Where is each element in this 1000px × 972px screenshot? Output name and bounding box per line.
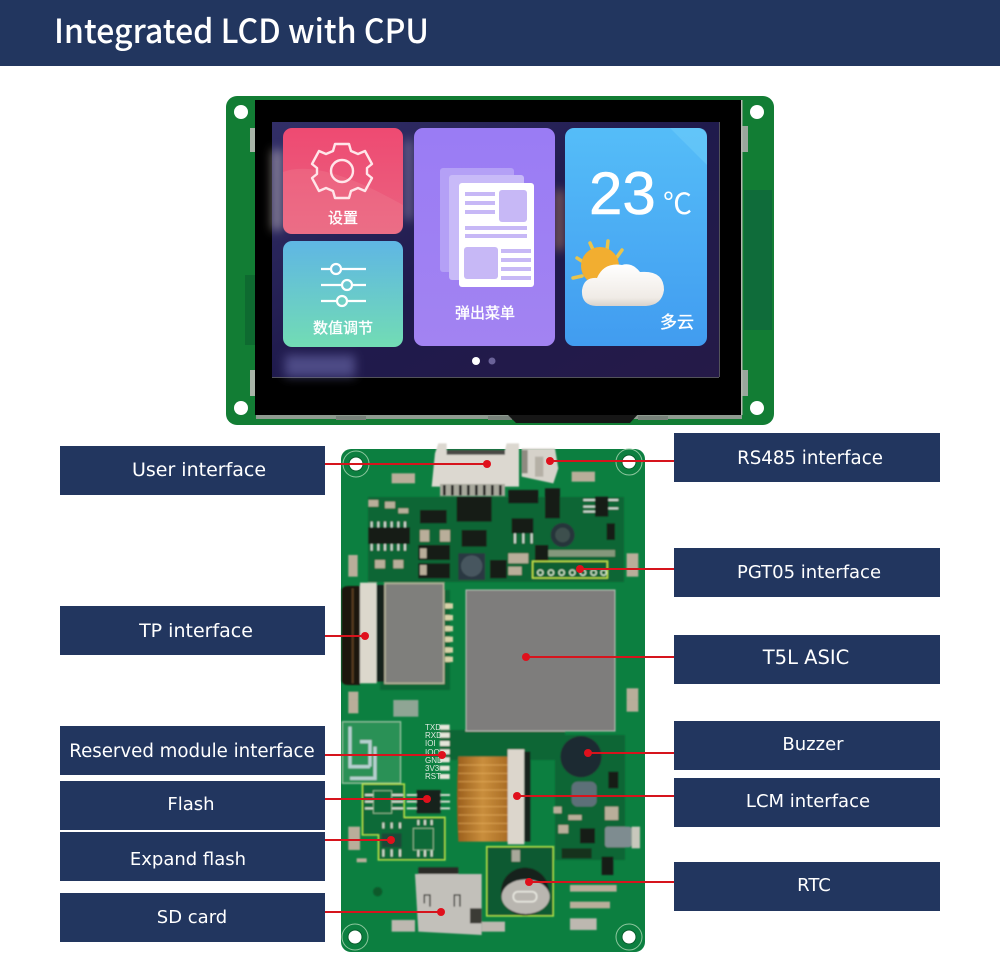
label: cloudy: 多云 xyxy=(660,313,694,332)
label: T5L ASIC xyxy=(674,635,940,684)
label: LCM interface: LCM interface xyxy=(746,791,870,812)
mounting holes xyxy=(348,455,636,944)
RS485 connector xyxy=(522,448,558,483)
bottom half components xyxy=(342,700,640,935)
icon: gear xyxy=(312,144,372,198)
darker board zones xyxy=(368,497,625,860)
serial pad labels: TXD xyxy=(425,723,441,732)
label: Flash xyxy=(60,781,325,830)
PCB back view xyxy=(341,443,645,952)
icon: sun and cloud xyxy=(573,241,664,306)
icon: sliders xyxy=(321,264,366,306)
label: SD card xyxy=(60,893,325,942)
label: Expand flash: Expand flash xyxy=(130,849,246,870)
serial pad labels: 3V3 xyxy=(425,764,440,773)
test pads xyxy=(445,603,453,662)
chips xyxy=(368,488,615,578)
icon: document xyxy=(440,168,534,287)
label: Flash: Flash xyxy=(167,794,215,815)
callout dots xyxy=(361,457,592,916)
label: RS485 interface xyxy=(674,433,940,482)
flash outline xyxy=(362,784,445,860)
small shield xyxy=(385,583,444,683)
label: T5L ASIC: T5L ASIC xyxy=(762,646,849,669)
inductors and parts xyxy=(572,782,597,807)
serial pad labels: IOI xyxy=(425,739,436,748)
label: RTC: RTC xyxy=(797,875,831,896)
label: RS485 interface: RS485 interface xyxy=(737,448,883,469)
TP FPC connector xyxy=(342,586,360,685)
card: value adjustment xyxy=(283,241,403,347)
small passives xyxy=(348,472,638,577)
card: popup menu xyxy=(414,128,555,346)
gold FPC ribbon xyxy=(457,757,508,842)
screen xyxy=(272,122,720,378)
PCB components (soft photo look) xyxy=(342,443,640,935)
top half components xyxy=(342,443,638,700)
label: value adjustment: 数值调节 xyxy=(313,320,373,337)
label: Reserved module interface xyxy=(60,726,325,775)
T5L shield xyxy=(466,590,615,731)
label: SD card: SD card xyxy=(157,907,227,928)
serial pad labels: RST xyxy=(425,772,441,781)
label: settings: 设置 xyxy=(328,210,358,227)
RTC battery xyxy=(487,847,553,916)
unit: ℃ xyxy=(663,181,692,223)
serial pad labels: IOO xyxy=(425,748,440,757)
serial pad labels: RXD xyxy=(425,731,442,740)
chip pins xyxy=(372,500,618,551)
PGT05 header xyxy=(533,561,607,578)
label: User interface: User interface xyxy=(132,459,266,481)
card: weather xyxy=(565,128,707,346)
antenna xyxy=(342,722,401,783)
label: TP interface xyxy=(60,606,325,655)
label: TP interface: TP interface xyxy=(138,620,253,642)
serial pads xyxy=(440,725,450,779)
callout lines xyxy=(325,461,674,912)
header connector xyxy=(432,443,519,487)
black bezel xyxy=(255,100,742,415)
LCD display module xyxy=(226,96,774,425)
serial pad labels: GND xyxy=(425,756,443,765)
label: Reserved module interface: Reserved module interface xyxy=(69,741,315,762)
label: popup menu: 弹出菜单 xyxy=(455,305,515,322)
LCM FPC connector xyxy=(508,749,524,844)
title banner xyxy=(0,0,1000,66)
label: Buzzer xyxy=(674,721,940,770)
label: PGT05 interface: PGT05 interface xyxy=(737,562,881,583)
inductors xyxy=(551,523,575,547)
label: Buzzer: Buzzer xyxy=(782,734,844,755)
label: PGT05 interface xyxy=(674,548,940,597)
label: RTC xyxy=(674,862,940,911)
label: LCM interface xyxy=(674,778,940,827)
title: Integrated LCD with CPU xyxy=(54,5,429,53)
card: settings xyxy=(283,128,403,234)
page dots xyxy=(472,357,496,365)
temperature: 23 xyxy=(589,160,656,227)
label: User interface xyxy=(60,446,325,495)
buzzer xyxy=(560,736,602,777)
label: Expand flash xyxy=(60,832,325,881)
SD card slot xyxy=(418,867,458,874)
serial pad labels xyxy=(425,723,443,781)
